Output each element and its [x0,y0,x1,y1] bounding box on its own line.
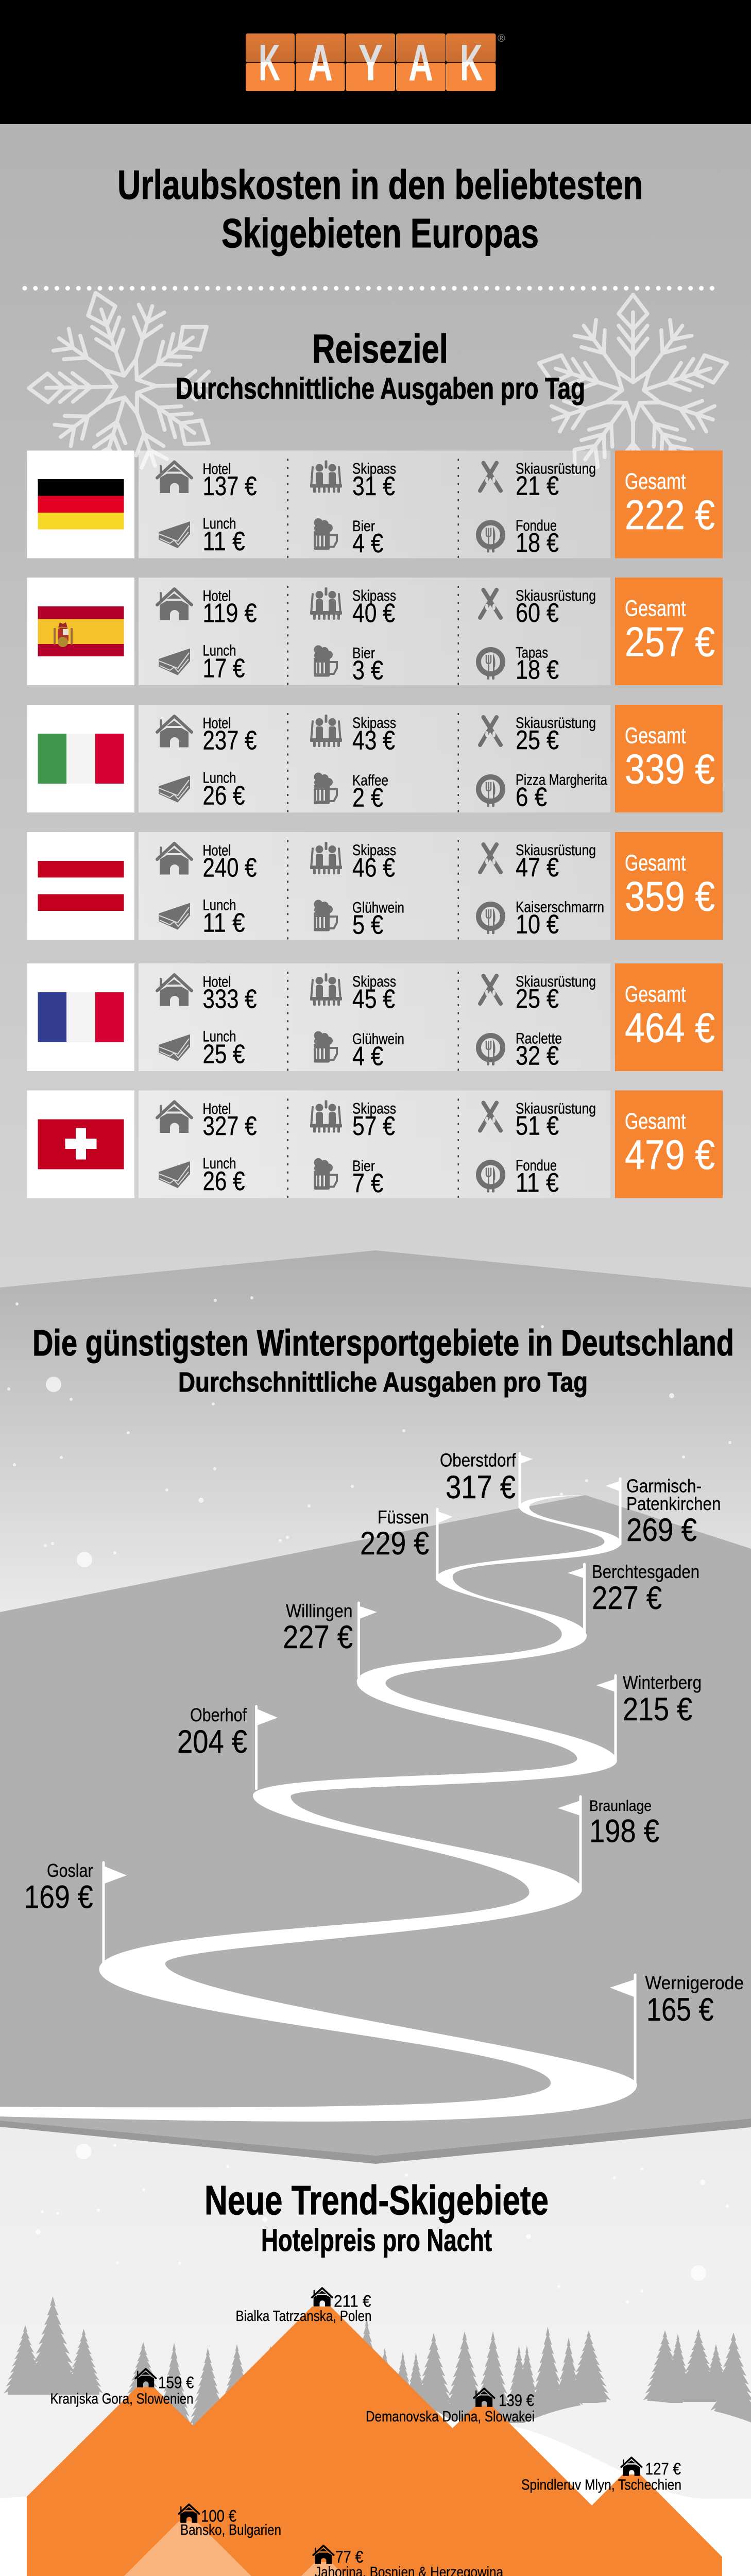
local dish [479,772,607,812]
total: Gesamt [625,596,686,621]
lunch [159,1028,245,1070]
skipass: 43 € [352,725,395,755]
local dish [479,517,559,558]
skipass [310,973,396,1014]
ski equipment: 60 € [516,598,559,628]
flag: Oberstdorf: 317 € [446,1469,516,1505]
lunch: 11 € [203,527,245,556]
hotel: Hotel [203,715,231,732]
skipass [310,461,396,501]
KAYAK logo: ® [498,33,505,44]
KAYAK logo: A [408,34,433,92]
resort: Jahorina: 77 € [335,2548,363,2566]
resort: Demanovska Dolina: 139 € [499,2391,534,2410]
coffee [314,772,388,813]
hotel: 237 € [203,725,257,755]
resort: Jahorina [313,2546,504,2576]
ski equipment: Skiausrüstung [516,715,596,732]
local dish: 6 € [516,782,547,812]
hotel [157,842,257,883]
resort: Bialka Tatrzanska [236,2288,372,2325]
hotel: Hotel [203,461,231,478]
lunch: 17 € [203,653,245,683]
total: Gesamt [625,1109,686,1134]
skipass [310,842,396,883]
resort: Bansko [179,2504,281,2538]
heading: Neue Trend-Skigebiete: Neue Trend-Skigebiete [204,2177,549,2223]
skipass: Skipass [352,461,396,477]
ski equipment: Skiausrüstung [516,842,596,859]
local dish: Pizza Margherita [516,772,607,788]
flag: Winterberg [596,1672,702,1761]
lunch [159,1155,245,1196]
ski slope [0,1495,637,2122]
local dish: 18 € [516,655,559,685]
flag: Garmisch-Patenkirchen: Garmisch- [626,1476,702,1496]
beer: 4 € [352,529,383,558]
hotel [157,715,257,755]
resort: Demanovska Dolina [366,2388,535,2425]
beer: Bier [352,1158,375,1175]
flag: Garmisch-Patenkirchen [606,1476,721,1548]
local dish: 11 € [516,1168,559,1198]
skipass: Skipass [352,587,396,604]
ski equipment: Skiausrüstung [516,587,596,604]
lunch: Lunch [203,1155,236,1172]
mulled wine: Glühwein [352,1030,404,1048]
local dish: Tapas [516,644,548,662]
local dish: Fondue [516,1157,557,1174]
hotel: 137 € [203,471,257,501]
hotel [157,974,257,1014]
hotel: 333 € [203,984,257,1014]
resort: Kranjska Gora: Kranjska Gora, Slowenien [50,2391,194,2407]
dark ski mountain [0,1495,751,2156]
lunch [159,642,245,683]
ski equipment: Skiausrüstung [516,461,596,477]
header bar with KAYAK logo [0,0,751,124]
beer [314,1158,383,1198]
total: Gesamt [625,850,686,876]
ski equipment [480,587,596,628]
flag: Winterberg: Winterberg [623,1672,702,1693]
flag: Willingen [283,1600,377,1677]
resort: Spindleruv Mlyn: Spindleruv Mlyn, Tschechien [521,2477,681,2494]
heading: Reiseziel: Durchschnittliche Ausgaben pro Tag [176,372,585,405]
orange mountains [27,2307,722,2576]
flag: Braunlage: Braunlage [589,1798,652,1815]
lunch: 25 € [203,1040,245,1070]
flag: Wernigerode: Wernigerode [645,1972,744,1993]
hotel: 240 € [203,853,257,883]
ski equipment: 51 € [516,1111,559,1141]
flag: Germany [38,479,124,530]
resort: Bansko: 100 € [201,2507,236,2526]
ski equipment: 25 € [516,984,559,1014]
lunch: 26 € [203,1166,245,1196]
total [615,832,723,940]
flag: Oberhof [177,1704,278,1789]
flag: Braunlage [558,1797,659,1889]
panel: France [27,963,723,1072]
total: 464 € [625,1005,715,1051]
resort: Demanovska Dolina: Demanovska Dolina, Slowakei [366,2409,535,2425]
KAYAK logo: K [259,34,280,92]
lunch: Lunch [203,896,236,914]
coffee: Kaffee [352,772,388,789]
skipass: 45 € [352,984,395,1014]
panel: Switzerland [27,1090,723,1198]
heading: Wintersportgebiete [32,1323,734,1398]
total: 222 € [625,492,715,538]
resort: Bansko: Bansko, Bulgarien [180,2522,281,2538]
lunch: Lunch [203,770,236,786]
ski equipment: 47 € [516,853,559,883]
beer: 7 € [352,1168,383,1198]
total [615,450,723,558]
heading: Neue Trend-Skigebiete: Hotelpreis pro Nacht [261,2223,492,2258]
ski equipment [480,842,596,883]
local dish: Fondue [516,517,557,534]
skipass: Skipass [352,1100,396,1117]
flag: Berchtesgaden: Berchtesgaden [592,1561,699,1582]
flag: Wernigerode: 165 € [646,1992,714,2028]
mulled wine [314,900,404,940]
flag: Wernigerode [610,1972,744,2083]
resort: Kranjska Gora [50,2369,194,2407]
flag: France [38,992,124,1042]
mulled wine [314,1030,404,1072]
flag: Willingen: 227 € [283,1619,353,1655]
ski equipment: Skiausrüstung [516,973,596,990]
local dish [479,899,604,940]
skipass [310,1100,396,1141]
ski equipment [480,1100,596,1141]
main title [117,162,643,256]
lunch: Lunch [203,1028,236,1045]
panel: Italy [27,705,723,813]
heading: Neue Trend-Skigebiete [204,2177,549,2258]
skipass: Skipass [352,842,396,859]
flag: Willingen: Willingen [286,1600,352,1621]
lunch: 26 € [203,781,245,811]
skipass: 40 € [352,599,395,629]
beer: Bier [352,518,375,535]
total [615,578,723,685]
lunch [159,896,245,938]
skipass [310,587,396,629]
resort: Spindleruv Mlyn [521,2458,681,2494]
flag: Berchtesgaden: 227 € [592,1580,662,1616]
local dish [479,1030,562,1071]
hotel: Hotel [203,842,231,859]
hotel [157,587,257,629]
trees [4,2296,751,2428]
flag: Oberhof: 204 € [177,1724,247,1760]
hotel: 327 € [203,1111,257,1141]
lunch [159,515,245,556]
hotel [157,461,257,501]
skipass [310,715,396,755]
local dish [479,1157,559,1198]
total: Gesamt [625,982,686,1007]
total: 479 € [625,1132,715,1178]
panel: Germany [27,450,723,558]
skipass: 46 € [352,853,395,883]
flag: Austria [38,861,124,911]
resort: Bialka Tatrzanska: 211 € [334,2292,371,2310]
KAYAK logo: K [460,34,483,92]
flag: Oberstdorf: Oberstdorf [440,1450,516,1470]
hotel [157,1100,257,1141]
snow hills [0,2395,751,2576]
skipass: 57 € [352,1111,395,1141]
main title: Skigebieten Europas [221,210,539,256]
beer: 3 € [352,655,383,685]
sky panel behind the ski slope [0,1250,751,1615]
panel: Austria [27,832,723,940]
flag: Goslar: Goslar [47,1860,93,1881]
hotel: 119 € [203,599,257,629]
flag: Winterberg: 215 € [623,1691,692,1727]
KAYAK logo: A [308,34,333,92]
resort: Bialka Tatrzanska: Bialka Tatrzanska, Polen [236,2308,372,2325]
flag: Goslar: 169 € [24,1879,93,1916]
flag: Berchtesgaden [568,1561,699,1633]
skipass: 31 € [352,471,395,501]
total: 339 € [625,746,715,792]
skipass: Skipass [352,715,396,732]
flag: Goslar [24,1860,127,1963]
chevron shadow band [0,2119,751,2164]
mulled wine: 5 € [352,910,383,940]
resort: Spindleruv Mlyn: 127 € [645,2460,681,2478]
local dish: 10 € [516,910,559,940]
lunch: Lunch [203,642,236,659]
local dish [479,644,559,685]
heading: Reiseziel [176,326,585,405]
flag: Füssen [360,1506,453,1580]
skipass: Skipass [352,973,396,990]
icon: snowflake left [0,256,272,531]
total: Gesamt [625,469,686,494]
ski equipment: Skiausrüstung [516,1100,596,1117]
total [615,705,723,812]
ski equipment [480,461,596,501]
local dish: Raclette [516,1030,562,1047]
lunch [159,770,245,811]
total: 359 € [625,874,715,920]
KAYAK logo: Y [359,34,383,92]
coffee: 2 € [352,783,383,813]
ski equipment [480,715,596,755]
flag: Garmisch-Patenkirchen: 269 € [626,1512,697,1548]
total [615,963,723,1071]
flag: Oberhof: Oberhof [190,1704,247,1725]
lunch: Lunch [203,515,236,532]
flag: Füssen: Füssen [378,1506,429,1528]
flag: Braunlage: 198 € [589,1814,659,1850]
local dish: 18 € [516,528,559,558]
local dish: 32 € [516,1041,559,1071]
total [615,1090,723,1198]
icon: snowflake right [525,295,746,510]
ski equipment: 21 € [516,471,559,501]
flag: Füssen: 229 € [360,1526,429,1562]
heading: Wintersportgebiete: Durchschnittliche Ausgaben pro Tag [178,1367,588,1398]
light orange mountains [27,2521,568,2576]
flag: Italy [38,734,124,784]
beer [314,518,383,558]
total: 257 € [625,619,715,666]
KAYAK logo [246,33,505,92]
panel: Spain [27,578,723,685]
hotel: Hotel [203,1100,231,1117]
local dish: Kaiserschmarrn [516,899,604,916]
ski equipment [480,973,596,1014]
lunch: 11 € [203,908,245,938]
resort: Kranjska Gora: 159 € [158,2373,194,2392]
flag: Oberstdorf [440,1450,533,1507]
flag: Switzerland [38,1119,124,1170]
beer [314,645,383,685]
total: Gesamt [625,723,686,748]
heading: Reiseziel: Reiseziel [312,326,448,371]
beer: Bier [352,645,375,662]
mulled wine: 4 € [352,1042,383,1072]
hotel: Hotel [203,974,231,990]
ski equipment: 25 € [516,725,559,755]
flag: Garmisch-Patenkirchen: Patenkirchen [626,1493,721,1514]
flag: Spain [38,606,124,656]
hotel: Hotel [203,587,231,605]
mulled wine: Glühwein [352,900,404,916]
